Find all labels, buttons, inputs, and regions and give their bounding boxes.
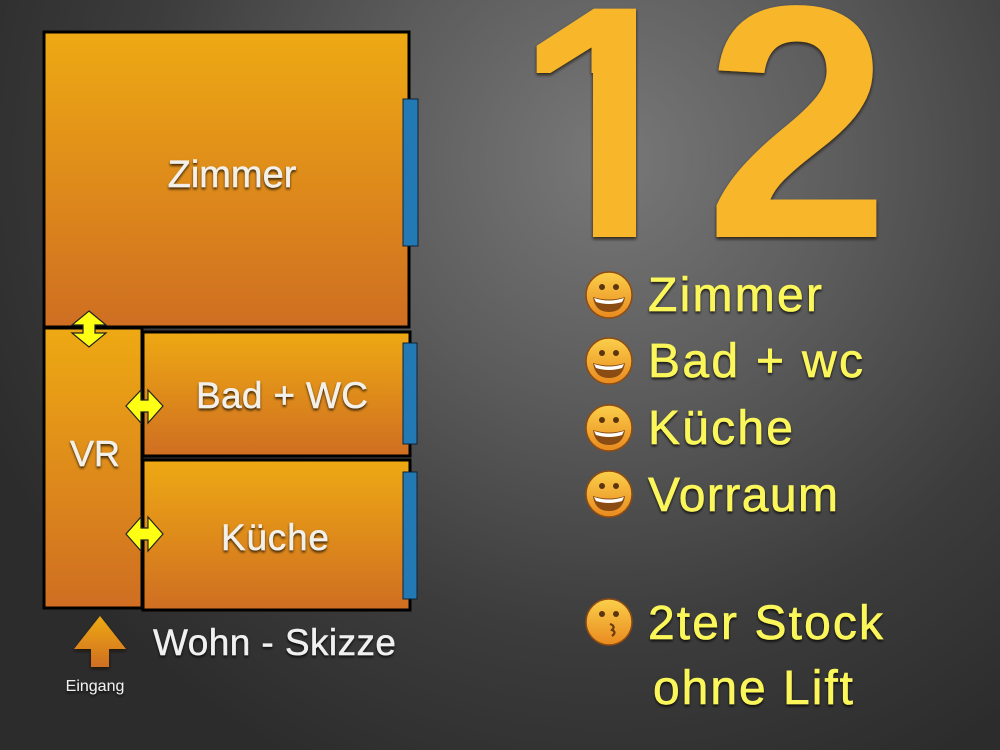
big number 12 — [534, 5, 878, 241]
room: VR: VR — [70, 433, 120, 474]
room: VR — [44, 328, 142, 608]
list item: Küche: Küche — [648, 402, 793, 455]
icon: kissing face — [586, 599, 632, 645]
floor plan sketch — [44, 32, 418, 610]
note: 2ter Stock ohne Lift: 2ter Stock — [648, 597, 884, 650]
room: Bad + WC — [143, 332, 410, 456]
icon: smile — [586, 405, 632, 451]
icon: smile — [586, 471, 632, 517]
room: Zimmer — [44, 32, 409, 327]
window: Zimmer — [403, 99, 418, 246]
list item: Vorraum: Vorraum — [648, 469, 838, 522]
entrance arrow — [74, 616, 126, 667]
label: Wohn - Skizze: Wohn - Skizze — [153, 622, 396, 663]
room: Bad + WC: Bad + WC — [196, 375, 368, 416]
door arrow: VR to Küche — [126, 517, 163, 551]
list item: Bad + wc: Bad + wc — [648, 335, 863, 388]
door arrow: Zimmer to VR — [72, 311, 106, 347]
room: Küche — [143, 460, 410, 610]
icon: smile — [586, 338, 632, 384]
note: 2ter Stock ohne Lift: ohne Lift — [653, 662, 853, 715]
window: Küche — [403, 472, 417, 599]
label: Eingang: Eingang — [66, 678, 124, 695]
icon: smile — [586, 272, 632, 318]
room: Küche: Küche — [221, 517, 329, 558]
door arrow: VR to Bad — [126, 390, 163, 423]
room: Zimmer: Zimmer — [168, 154, 297, 196]
list item: Zimmer: Zimmer — [648, 269, 822, 322]
note: 2ter Stock ohne Lift — [586, 597, 884, 715]
window: Bad — [403, 343, 417, 444]
